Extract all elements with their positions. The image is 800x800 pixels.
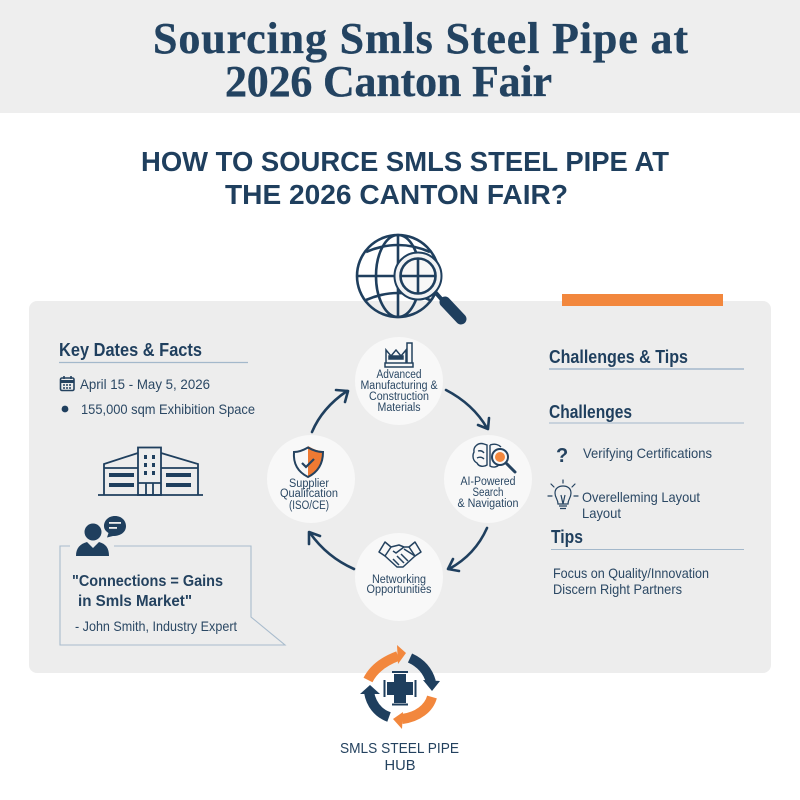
- quote text: [72, 573, 237, 634]
- main panel: [29, 301, 771, 673]
- icon: speaking person: [76, 516, 126, 556]
- step: advanced manufacturing: Manufacturing &: [360, 380, 438, 392]
- cycle diagram: [267, 337, 532, 621]
- date text: April 15 - May 5, 2026: [80, 376, 210, 392]
- hub label: [340, 740, 459, 774]
- title: Sourcing Smls Steel Pipe at: [153, 14, 688, 63]
- heading: challenges and tips: Challenges & Tips: [549, 347, 688, 367]
- icon: brain with magnifier: [473, 444, 515, 472]
- step: AI-powered search: Search: [472, 487, 504, 499]
- icon: pipe hub cycle: [360, 645, 440, 729]
- step: supplier qualification: Supplier: [289, 478, 329, 490]
- exhibition space text: 155,000 sqm Exhibition Space: [81, 401, 255, 417]
- subtitle heading: THE 2026 CANTON FAIR?: [225, 179, 568, 210]
- icon: calendar: [60, 376, 74, 390]
- title: 2026 Canton Fair: [225, 57, 552, 106]
- header band: [0, 0, 800, 113]
- subtitle heading: [141, 146, 669, 210]
- tips list: Discern Right Partners: [553, 581, 682, 597]
- step: networking: [355, 533, 443, 621]
- quote text: "Connections = Gains: [72, 573, 223, 590]
- step: advanced manufacturing: Advanced: [376, 369, 422, 381]
- step: networking: Networking: [372, 574, 426, 586]
- icon: exhibition building: [98, 448, 203, 495]
- challenge: layout: Layout: [582, 505, 621, 521]
- challenge: certifications: Verifying Certifications: [583, 445, 712, 461]
- quote text: - John Smith, Industry Expert: [75, 618, 237, 634]
- subtitle heading: HOW TO SOURCE SMLS STEEL PIPE AT: [141, 146, 669, 177]
- step: supplier qualification: Qualifcation: [280, 488, 338, 500]
- challenge: layout: [582, 489, 700, 521]
- step: AI-powered search: AI-Powered: [460, 476, 516, 488]
- hub label: HUB: [384, 757, 416, 774]
- step: supplier qualification: (ISO/CE): [289, 500, 329, 512]
- icon: globe with magnifier: [357, 235, 461, 319]
- tips list: [553, 565, 709, 597]
- panel: key dates and facts: [59, 340, 285, 645]
- icon: light bulb: [548, 480, 578, 508]
- heading: challenges: Challenges: [549, 402, 632, 422]
- icon: factory: [385, 343, 413, 367]
- icon: shield: [294, 446, 323, 478]
- quote text: in Smls Market": [78, 593, 192, 610]
- step: advanced manufacturing: Materials: [378, 402, 421, 414]
- hub label: SMLS STEEL PIPE: [340, 740, 459, 757]
- step: networking: Opportunities: [366, 584, 432, 596]
- step: AI-powered search: [444, 435, 532, 523]
- heading: tips: Tips: [551, 527, 583, 547]
- panel: challenges and tips: [548, 347, 744, 597]
- bullet: [62, 406, 68, 412]
- step: AI-powered search: & Navigation: [458, 498, 518, 510]
- step: supplier qualification: [267, 435, 355, 523]
- heading: key dates: Key Dates & Facts: [59, 340, 202, 360]
- step: advanced manufacturing: Construction: [369, 391, 429, 403]
- arrows between steps: [309, 390, 489, 571]
- icon: question mark: ?: [556, 445, 568, 467]
- orange accent bar: [562, 294, 723, 306]
- icon: handshake: [379, 542, 421, 567]
- step: advanced manufacturing: [355, 337, 443, 425]
- challenge: layout: Overelleming Layout: [582, 489, 700, 505]
- tips list: Focus on Quality/Innovation: [553, 565, 709, 581]
- title: [153, 14, 688, 106]
- quote box: [60, 546, 285, 645]
